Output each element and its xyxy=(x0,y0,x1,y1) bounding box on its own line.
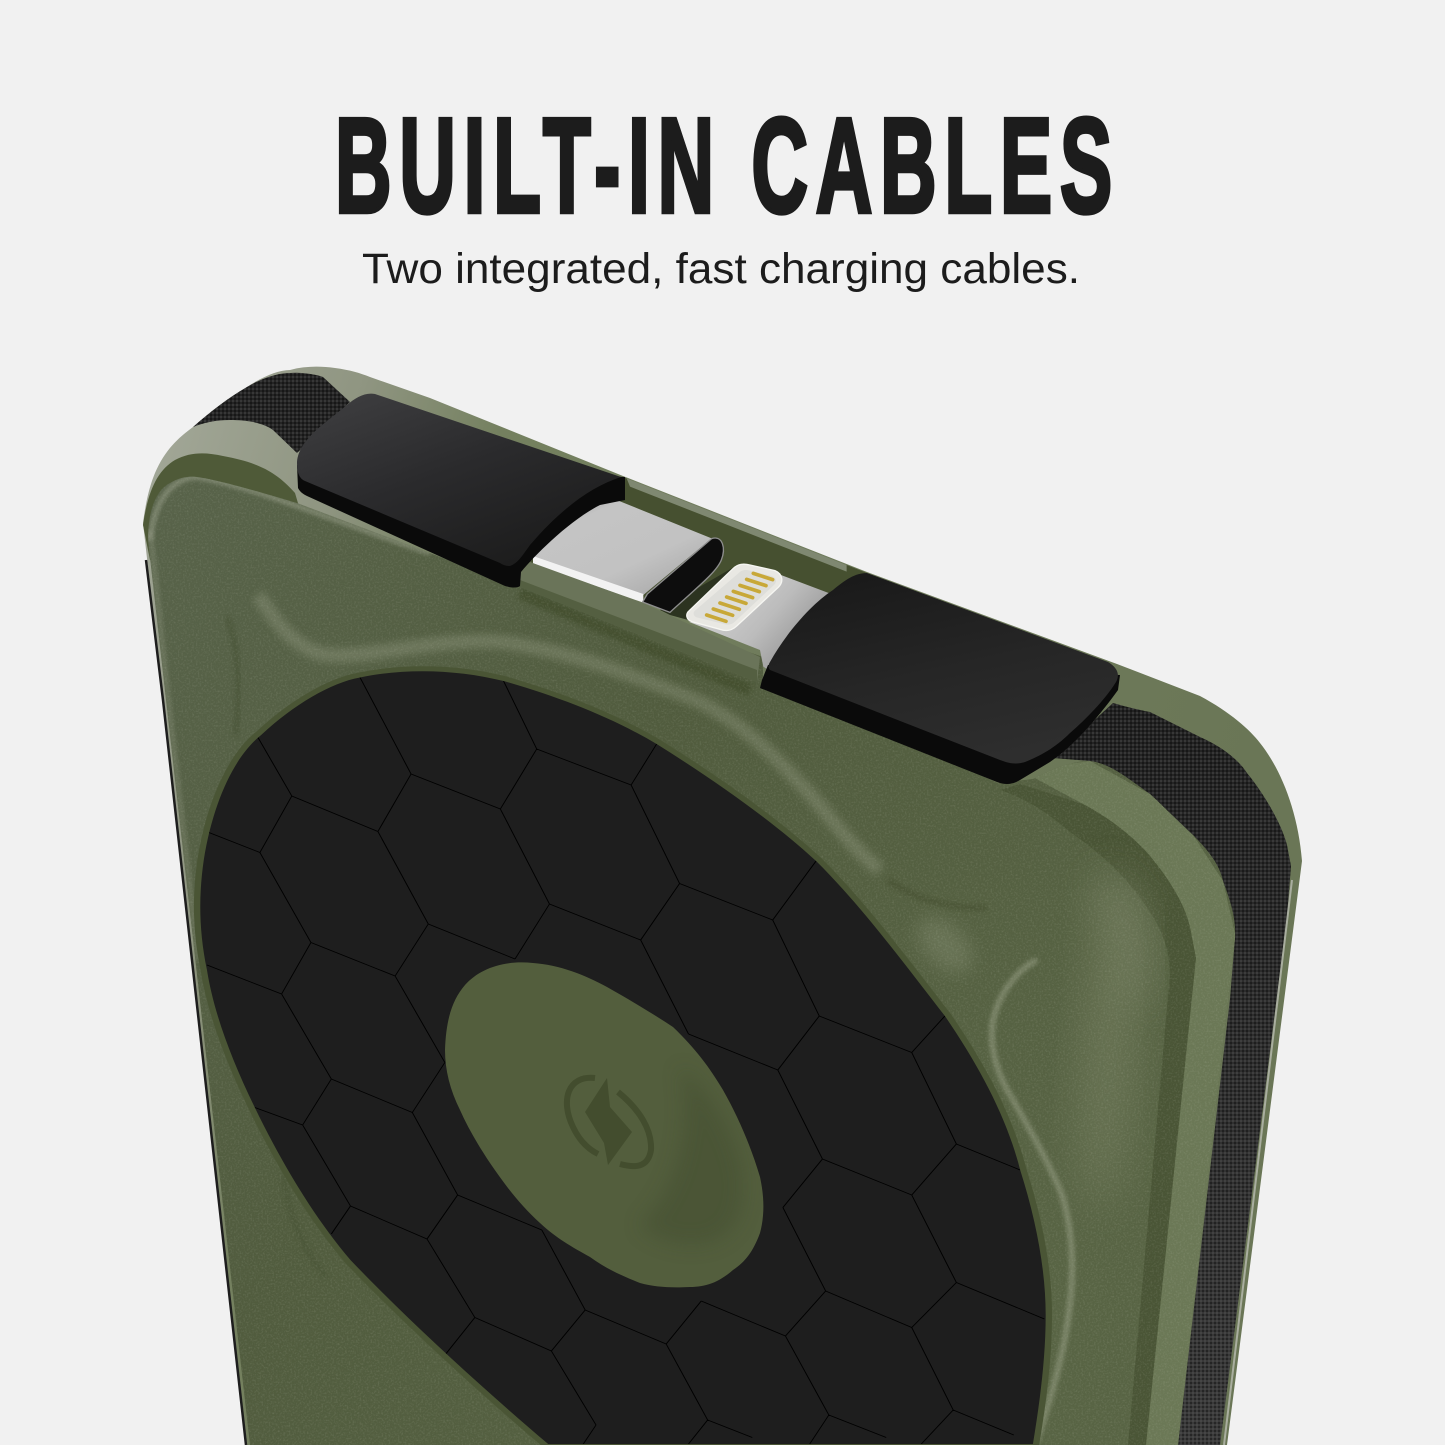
cap surface xyxy=(445,962,763,1287)
lightning pin field xyxy=(694,570,776,625)
left dark edge xyxy=(146,560,246,1445)
wireless disc xyxy=(200,671,1046,1444)
power bank device xyxy=(140,367,1302,1445)
logo arcs xyxy=(567,1078,598,1154)
back shell rim xyxy=(143,367,1302,1445)
title: BUILT-IN CABLES xyxy=(335,91,1112,241)
crease on left xyxy=(227,617,238,735)
top edge highlight xyxy=(150,477,430,553)
groove on the right xyxy=(1000,784,1196,1445)
usb-c opening xyxy=(643,538,723,612)
usb-c bright edge xyxy=(533,556,643,603)
cable recess xyxy=(530,477,867,673)
tab face xyxy=(297,394,621,566)
recess back wall xyxy=(530,477,867,653)
disc surface xyxy=(200,671,1046,1444)
tab face xyxy=(768,573,1118,763)
light edge on right rim xyxy=(1224,880,1292,1445)
subtitle: Two integrated, fast charging cables. xyxy=(362,245,1080,293)
charging logo xyxy=(567,1078,651,1166)
front green plate xyxy=(148,477,1235,1445)
shadow below ridge xyxy=(888,880,987,908)
ridge under tab xyxy=(258,595,880,870)
fabric band: right side xyxy=(1053,703,1291,1445)
tab side xyxy=(760,665,1120,784)
cable tab: lightning xyxy=(760,573,1120,784)
lightning tip xyxy=(687,564,782,631)
cable tab: usb-c xyxy=(297,394,625,588)
ledge lower wall xyxy=(520,580,757,682)
usb-c top face xyxy=(533,490,712,595)
swoosh ridge right of disc xyxy=(992,960,1072,1445)
highlight patch beside disc xyxy=(918,918,972,972)
left edge highlight xyxy=(150,530,198,960)
front ledge xyxy=(520,562,760,682)
grain texture on green xyxy=(140,470,1240,1445)
tab side xyxy=(297,465,625,588)
outer plate strip xyxy=(1020,761,1236,1445)
lower left bump xyxy=(283,1177,327,1277)
lightning connector xyxy=(687,564,834,673)
hexagon pattern xyxy=(207,678,1044,1444)
plate shading and relief xyxy=(150,477,1236,1445)
recess top rim xyxy=(627,478,847,572)
disc bed xyxy=(200,671,1046,1444)
ledge wall xyxy=(520,562,760,682)
lower ledge shadow xyxy=(520,593,750,690)
recess floor xyxy=(660,565,747,620)
cap recessed shade xyxy=(658,1102,734,1235)
center cap xyxy=(445,962,763,1287)
fabric band: top left xyxy=(193,373,350,453)
usb-c connector xyxy=(533,490,723,612)
logo bolt xyxy=(585,1078,632,1165)
logo arc right xyxy=(618,1092,651,1166)
soft sheen on right xyxy=(1080,908,1140,1178)
lightning pins xyxy=(707,573,773,621)
soft sheen at upper right of disc xyxy=(1090,880,1140,1000)
dark ledge top left xyxy=(143,453,300,560)
lightning body xyxy=(688,574,834,673)
